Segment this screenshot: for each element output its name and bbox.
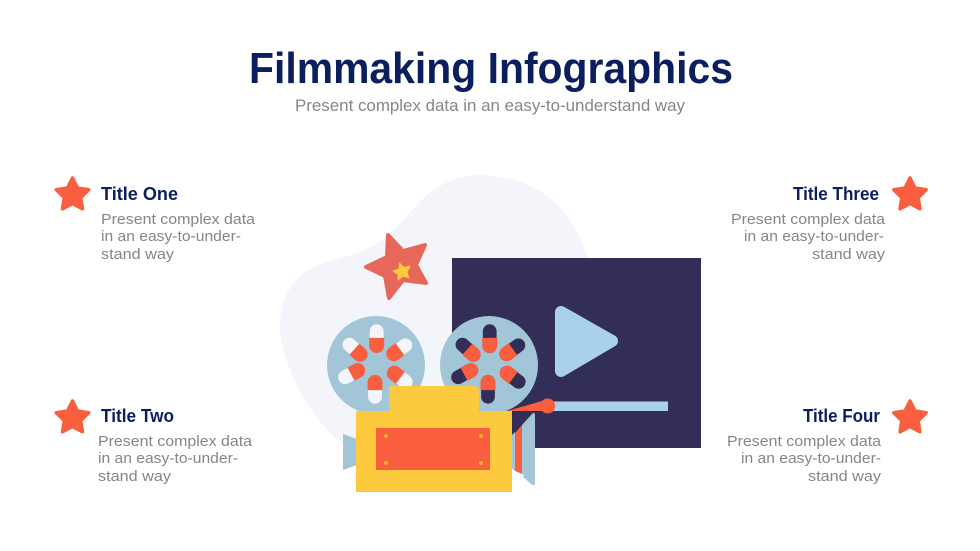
star badge	[366, 235, 426, 298]
text block: Title Two body: stand way	[98, 468, 172, 485]
subtitle: Present complex data in an easy-to-understand way	[295, 96, 685, 115]
illustration: film projector and screen	[280, 175, 701, 500]
heading: Title Two: Title Two	[101, 406, 174, 426]
text block: Title Two body	[98, 433, 253, 485]
text block: Title One body: stand way	[101, 246, 175, 263]
text block: Title One body: in an easy-to-under-	[101, 228, 241, 245]
left reel	[327, 316, 425, 414]
heading: Title One: Title One	[101, 184, 178, 204]
title: Filmmaking Infographics	[249, 44, 733, 93]
icon: star four	[894, 401, 926, 432]
back lens	[343, 434, 357, 470]
text block: Title Four body: stand way	[808, 468, 882, 485]
progress knob	[507, 398, 555, 414]
text block: Title Three body	[731, 211, 886, 263]
reel spokes	[335, 324, 416, 404]
item: Title Four	[727, 401, 926, 485]
text block: Title Two body: Present complex data	[98, 433, 253, 450]
heading: Title Four: Title Four	[803, 406, 880, 426]
text block: Title Four body: Present complex data	[727, 433, 882, 450]
plate rivets	[384, 434, 483, 465]
icon: star two	[56, 401, 89, 432]
text block: Title Four body	[727, 433, 882, 485]
text block: Title Three body: Present complex data	[731, 211, 886, 228]
item: Title One	[56, 178, 256, 263]
text block: Title One body: Present complex data	[101, 211, 256, 228]
icon: star one	[56, 178, 89, 209]
text block: Title One body	[101, 211, 256, 263]
text block: Title Three body: in an easy-to-under-	[744, 228, 884, 245]
camera label plate	[376, 428, 490, 470]
small yellow star	[393, 263, 410, 280]
icon: star three	[894, 178, 926, 209]
text block: Title Two body: in an easy-to-under-	[98, 450, 238, 467]
item: Title Two	[56, 401, 253, 485]
text block: Title Three body: stand way	[812, 246, 886, 263]
progress bar	[548, 402, 668, 411]
text block: Title Four body: in an easy-to-under-	[741, 450, 881, 467]
item: Title Three	[731, 178, 926, 263]
front lens	[511, 413, 535, 500]
camera body	[356, 386, 512, 492]
reel spokes	[448, 324, 529, 404]
background blob	[280, 175, 590, 480]
right reel	[440, 316, 538, 414]
video screen	[452, 258, 701, 448]
heading: Title Three: Title Three	[793, 184, 879, 204]
play icon	[561, 312, 612, 371]
